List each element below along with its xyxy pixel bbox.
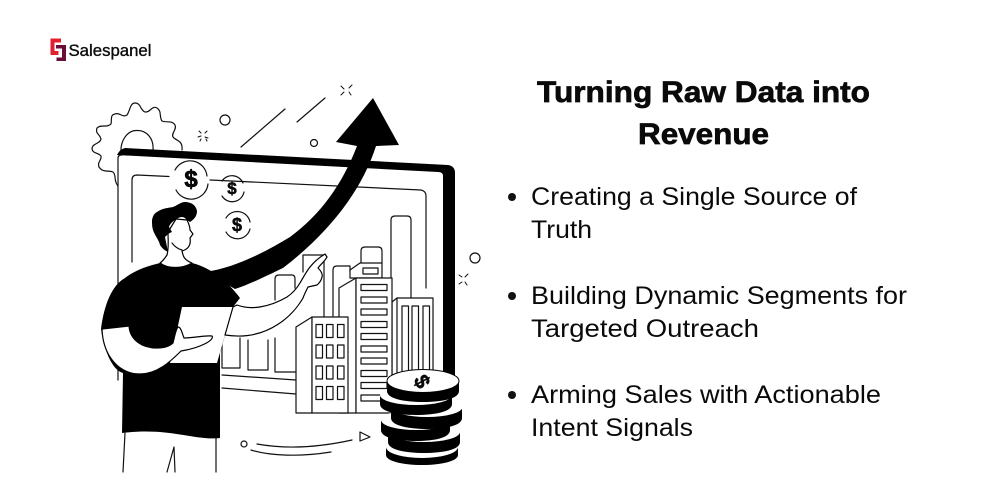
bullet: dynamic segments	[508, 282, 907, 343]
bullet: single source of truth	[508, 183, 857, 244]
decoration: sparkle left	[198, 131, 208, 141]
decoration: small circle centre	[310, 140, 318, 146]
building left	[296, 317, 348, 413]
logo: Salespanel	[50, 38, 152, 61]
logo: Salespanel: Salespanel	[68, 42, 152, 60]
person: right arm	[225, 254, 327, 336]
dollar coin large: $	[184, 166, 198, 193]
decoration: circle right	[470, 253, 480, 263]
dollar coin small lower	[226, 212, 250, 239]
person: face and neck	[160, 219, 193, 268]
dollar coin small top: $	[227, 179, 237, 198]
person: tablet	[170, 307, 233, 363]
bullet: dynamic segments: Targeted Outreach	[531, 315, 759, 343]
bullet: single source of truth: Creating a Single Source of	[531, 183, 857, 211]
bullet: intent signals	[508, 381, 881, 442]
person	[101, 202, 327, 472]
person: left arm	[102, 326, 212, 374]
bullet: intent signals: Intent Signals	[531, 414, 693, 442]
icon: gear	[92, 103, 182, 186]
illustration: data growth	[92, 85, 480, 472]
bullet: dynamic segments: Building Dynamic Segments for	[531, 282, 907, 310]
coin stack: dollar sign: $	[409, 371, 434, 393]
heading	[537, 76, 870, 151]
building tower top	[350, 263, 382, 278]
monitor	[117, 148, 455, 380]
decoration: swoosh	[241, 432, 370, 455]
heading: Revenue	[638, 118, 769, 151]
decoration: sparkle top	[341, 85, 352, 95]
person: hair	[152, 202, 197, 252]
dollar coin small lower: $	[232, 215, 242, 235]
bullet: intent signals: Arming Sales with Actionable	[531, 381, 881, 409]
building centre	[339, 278, 392, 413]
dollar coin small top	[222, 176, 244, 202]
arrow	[205, 98, 399, 289]
building right	[392, 298, 433, 380]
decoration: sparkle right	[459, 274, 468, 285]
dollar coin large	[175, 161, 208, 199]
chart bars	[222, 216, 411, 394]
person: leg lines	[123, 433, 216, 472]
decoration: diagonal line one	[241, 109, 285, 147]
heading: Turning Raw Data into	[537, 76, 870, 109]
person: t-shirt	[101, 263, 240, 438]
coin stack	[380, 370, 462, 465]
decoration: diagonal line two	[297, 98, 325, 122]
decoration: small circle top	[220, 115, 230, 125]
bullet: single source of truth: Truth	[531, 216, 592, 244]
icon: gear inner circle	[121, 130, 153, 153]
person: jaw line	[172, 243, 182, 250]
